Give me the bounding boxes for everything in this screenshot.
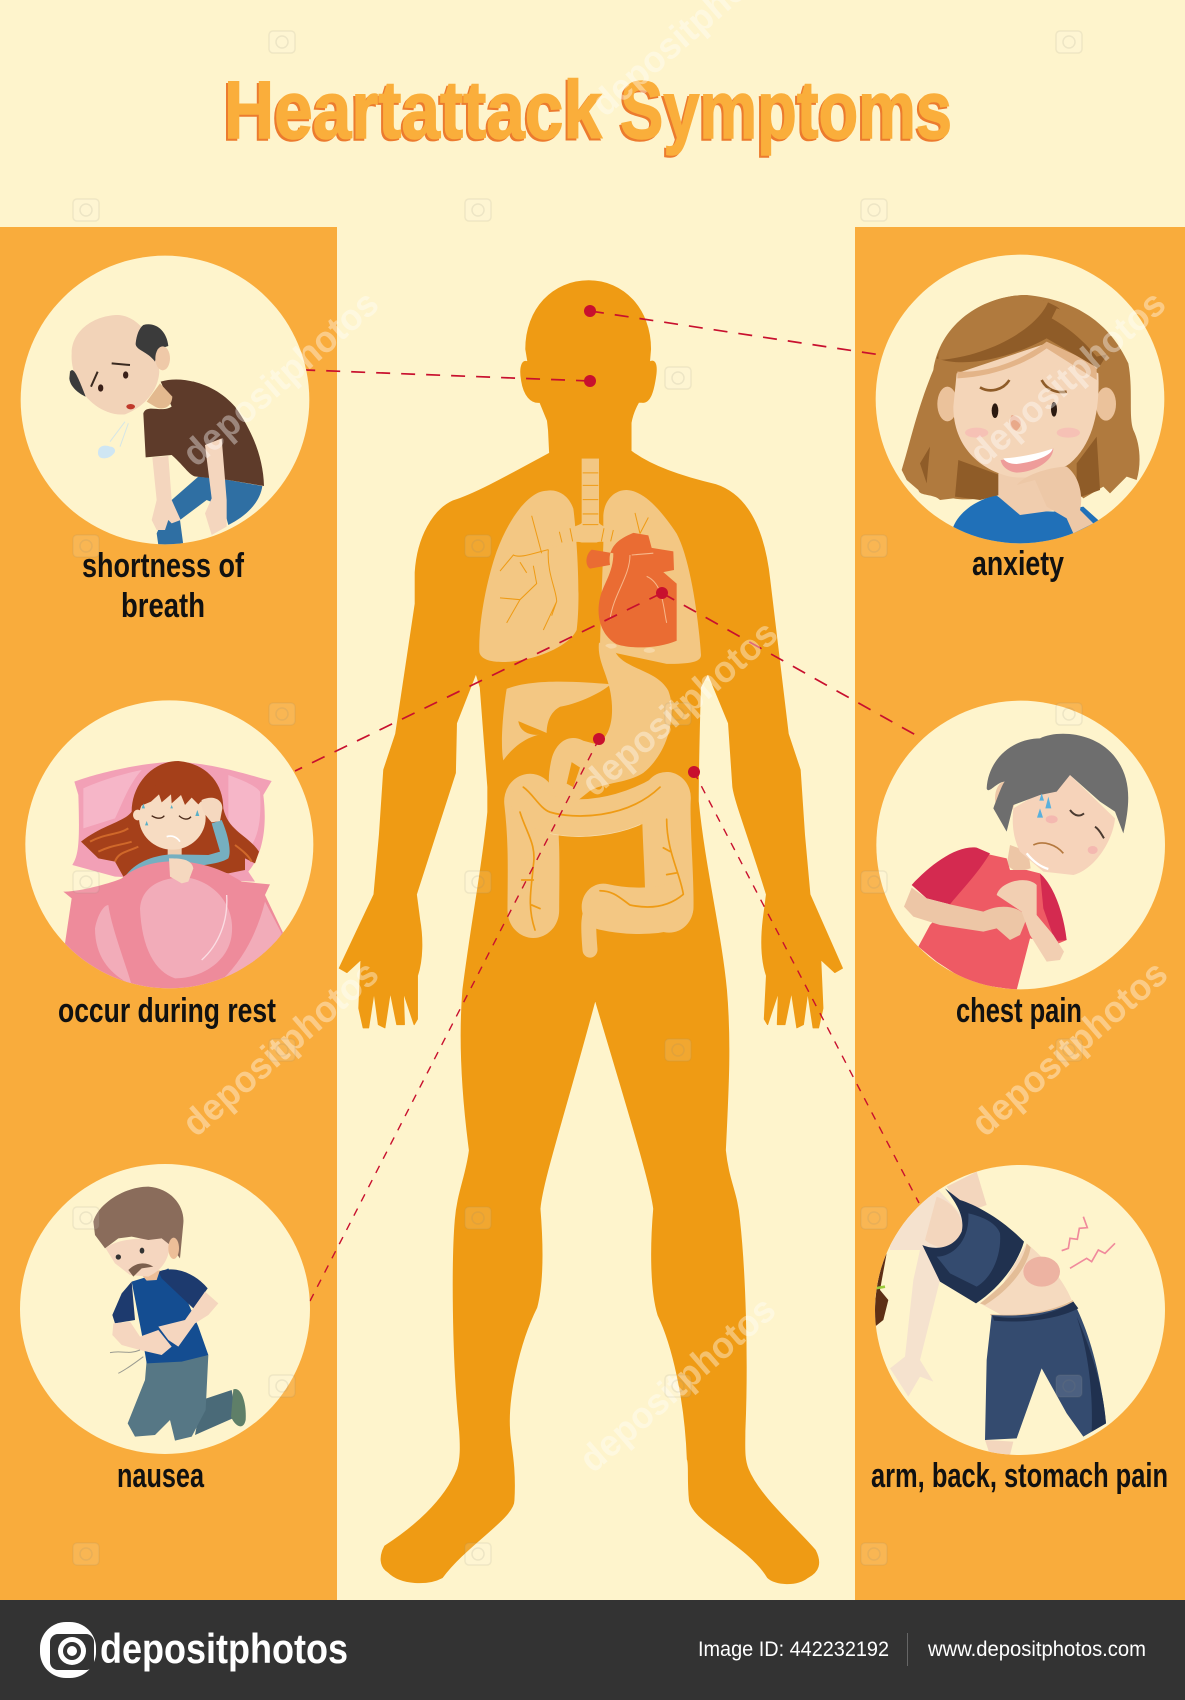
organs bbox=[479, 459, 701, 950]
heart bbox=[586, 533, 677, 653]
connector lines: lower bbox=[310, 739, 919, 1301]
title bbox=[224, 65, 952, 156]
label: shortness of breath bbox=[82, 547, 245, 625]
watermark: depositphotos bbox=[174, 952, 386, 1144]
illustration: occur during rest bbox=[25, 700, 313, 995]
illustration: arm, back, stomach pain bbox=[875, 1165, 1165, 1455]
lungs and trachea bbox=[479, 459, 701, 664]
watermark bbox=[174, 0, 1175, 1480]
illustration: shortness of breath bbox=[21, 256, 309, 545]
footer logo icon bbox=[40, 1622, 96, 1678]
image id: Image ID: 442232192 bbox=[698, 1638, 889, 1661]
title: Symptoms bbox=[620, 65, 952, 156]
panel: left symptoms column bbox=[0, 227, 337, 1600]
watermark: depositphotos bbox=[174, 282, 386, 474]
footer bar bbox=[0, 1600, 1185, 1700]
label: chest pain: chest pain bbox=[956, 992, 1082, 1030]
illustration: nausea bbox=[20, 1164, 310, 1454]
separator bbox=[907, 1633, 908, 1666]
watermark: depositphotos bbox=[963, 952, 1175, 1144]
illustration: chest pain bbox=[876, 701, 1165, 990]
watermark: depositphotos bbox=[961, 282, 1173, 474]
label: occur during rest: occur during rest bbox=[58, 992, 276, 1030]
label: anxiety: anxiety bbox=[972, 545, 1064, 583]
watermark camera marks bbox=[73, 31, 1082, 1565]
body silhouette bbox=[339, 281, 842, 1584]
label: nausea: nausea bbox=[117, 1457, 205, 1495]
label: shortness of breath: shortness of bbox=[82, 547, 245, 585]
watermark: depositphotos bbox=[573, 612, 785, 804]
panel: right symptoms column bbox=[855, 227, 1185, 1600]
watermark: depositphotos bbox=[571, 1288, 783, 1480]
connector lines bbox=[295, 311, 921, 771]
illustration: anxiety bbox=[876, 255, 1164, 550]
website: www.depositphotos.com bbox=[927, 1638, 1146, 1661]
label: shortness of breath: breath bbox=[121, 587, 205, 625]
intestines bbox=[520, 787, 683, 950]
footer brand: depositphotos bbox=[100, 1625, 348, 1672]
liver and stomach bbox=[502, 642, 672, 809]
title: Heartattack bbox=[224, 65, 602, 156]
symptom points bbox=[584, 305, 700, 778]
